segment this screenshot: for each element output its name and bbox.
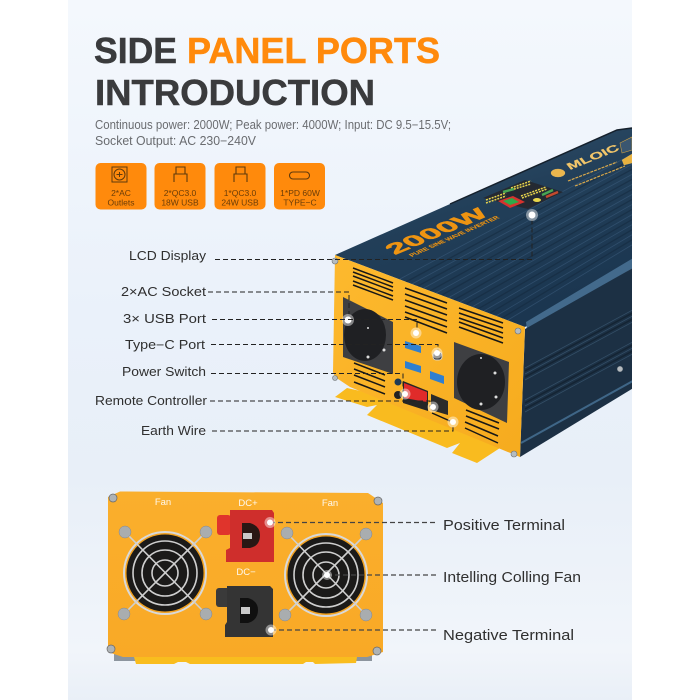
title: INTRODUCTION [95, 72, 375, 113]
right fan [279, 527, 372, 621]
inverter product [332, 127, 640, 463]
brand logo [551, 137, 632, 186]
badge: 1 QC3.0 USB: 1*QC3.0 [224, 188, 257, 198]
callout: USB port: 3× USB Port [123, 312, 207, 326]
AC socket left [343, 297, 393, 374]
callout: remote controller: Remote Controller [95, 394, 207, 408]
power rating lettering: 2000W [379, 205, 494, 257]
rear panel labels: Fan [322, 498, 338, 509]
rear panel labels: Fan [155, 497, 171, 508]
title [94, 30, 440, 113]
callout: LCD display: LCD Display [129, 249, 207, 263]
inverter top face [335, 127, 640, 330]
LCD display [483, 180, 563, 209]
callout: negative terminal [266, 624, 574, 644]
badge: 2 QC3.0 USB: 2*QC3.0 [164, 188, 197, 198]
callout: earth wire: Earth Wire [141, 424, 206, 438]
rear panel labels: DC+ [238, 498, 258, 509]
inverter side face [520, 264, 640, 457]
callouts upper [95, 209, 538, 438]
callout: Type-C port [125, 338, 442, 358]
rear feet [134, 657, 357, 664]
power switch [394, 378, 428, 411]
rear panel labels: DC− [236, 567, 256, 578]
remote port [431, 394, 448, 415]
badge: PD Type-C: 1*PD 60W [280, 188, 320, 198]
callout: Type-C port: Type−C Port [125, 338, 206, 352]
inverter front panel [332, 255, 525, 463]
callout: LCD display [129, 209, 538, 263]
callout: AC socket: 2×AC Socket [121, 285, 207, 299]
rear panel labels [155, 497, 338, 578]
badge: 1 QC3.0 USB: 24W USB [221, 198, 259, 208]
badge: AC outlets [96, 163, 146, 210]
callout: cooling fan [322, 569, 581, 586]
USB ports [405, 341, 444, 384]
badge: 2 QC3.0 USB: 18W USB [161, 198, 199, 208]
callout: remote controller [95, 394, 438, 412]
specification text: Continuous power: 2000W; Peak power: 4000W; Input: DC 9.5−15.5V; [95, 118, 451, 132]
callout: cooling fan: Intelling Colling Fan [443, 569, 581, 586]
specification text: Socket Output: AC 230−240V [95, 134, 257, 148]
badge: AC outlets: 2*AC [111, 188, 131, 198]
black negative terminal [216, 586, 273, 637]
AC socket right [454, 342, 509, 423]
title: PANEL PORTS [187, 30, 440, 71]
specification text [95, 118, 451, 148]
rear plate [108, 492, 383, 657]
callout: earth wire [141, 416, 458, 438]
side screw [617, 366, 623, 372]
callout: negative terminal: Negative Terminal [443, 627, 574, 644]
left fan [118, 526, 212, 620]
callout: positive terminal [264, 517, 565, 534]
badge: AC outlets: Outlets [108, 198, 134, 208]
rear panel [107, 492, 383, 664]
badge: PD Type-C [274, 163, 325, 210]
badge: 1 QC3.0 USB [214, 163, 266, 210]
power rating lettering: PURE SINE WAVE INVERTER [407, 215, 502, 258]
title: SIDE [94, 30, 177, 71]
callout: AC socket [121, 285, 354, 326]
brand logo: MLOIC [564, 142, 622, 172]
callout: power switch: Power Switch [122, 365, 206, 379]
rear corner screws [107, 494, 382, 655]
corner screws [332, 258, 521, 457]
badge: PD Type-C: TYPE−C [283, 198, 317, 208]
red positive terminal [217, 510, 274, 562]
Type-C port [433, 352, 442, 360]
callout: USB port [123, 312, 422, 338]
front vents [353, 268, 503, 443]
badge: 2 QC3.0 USB [154, 163, 206, 210]
callout: power switch [122, 365, 410, 400]
callout: positive terminal: Positive Terminal [443, 517, 565, 534]
rear shadow [114, 650, 372, 661]
